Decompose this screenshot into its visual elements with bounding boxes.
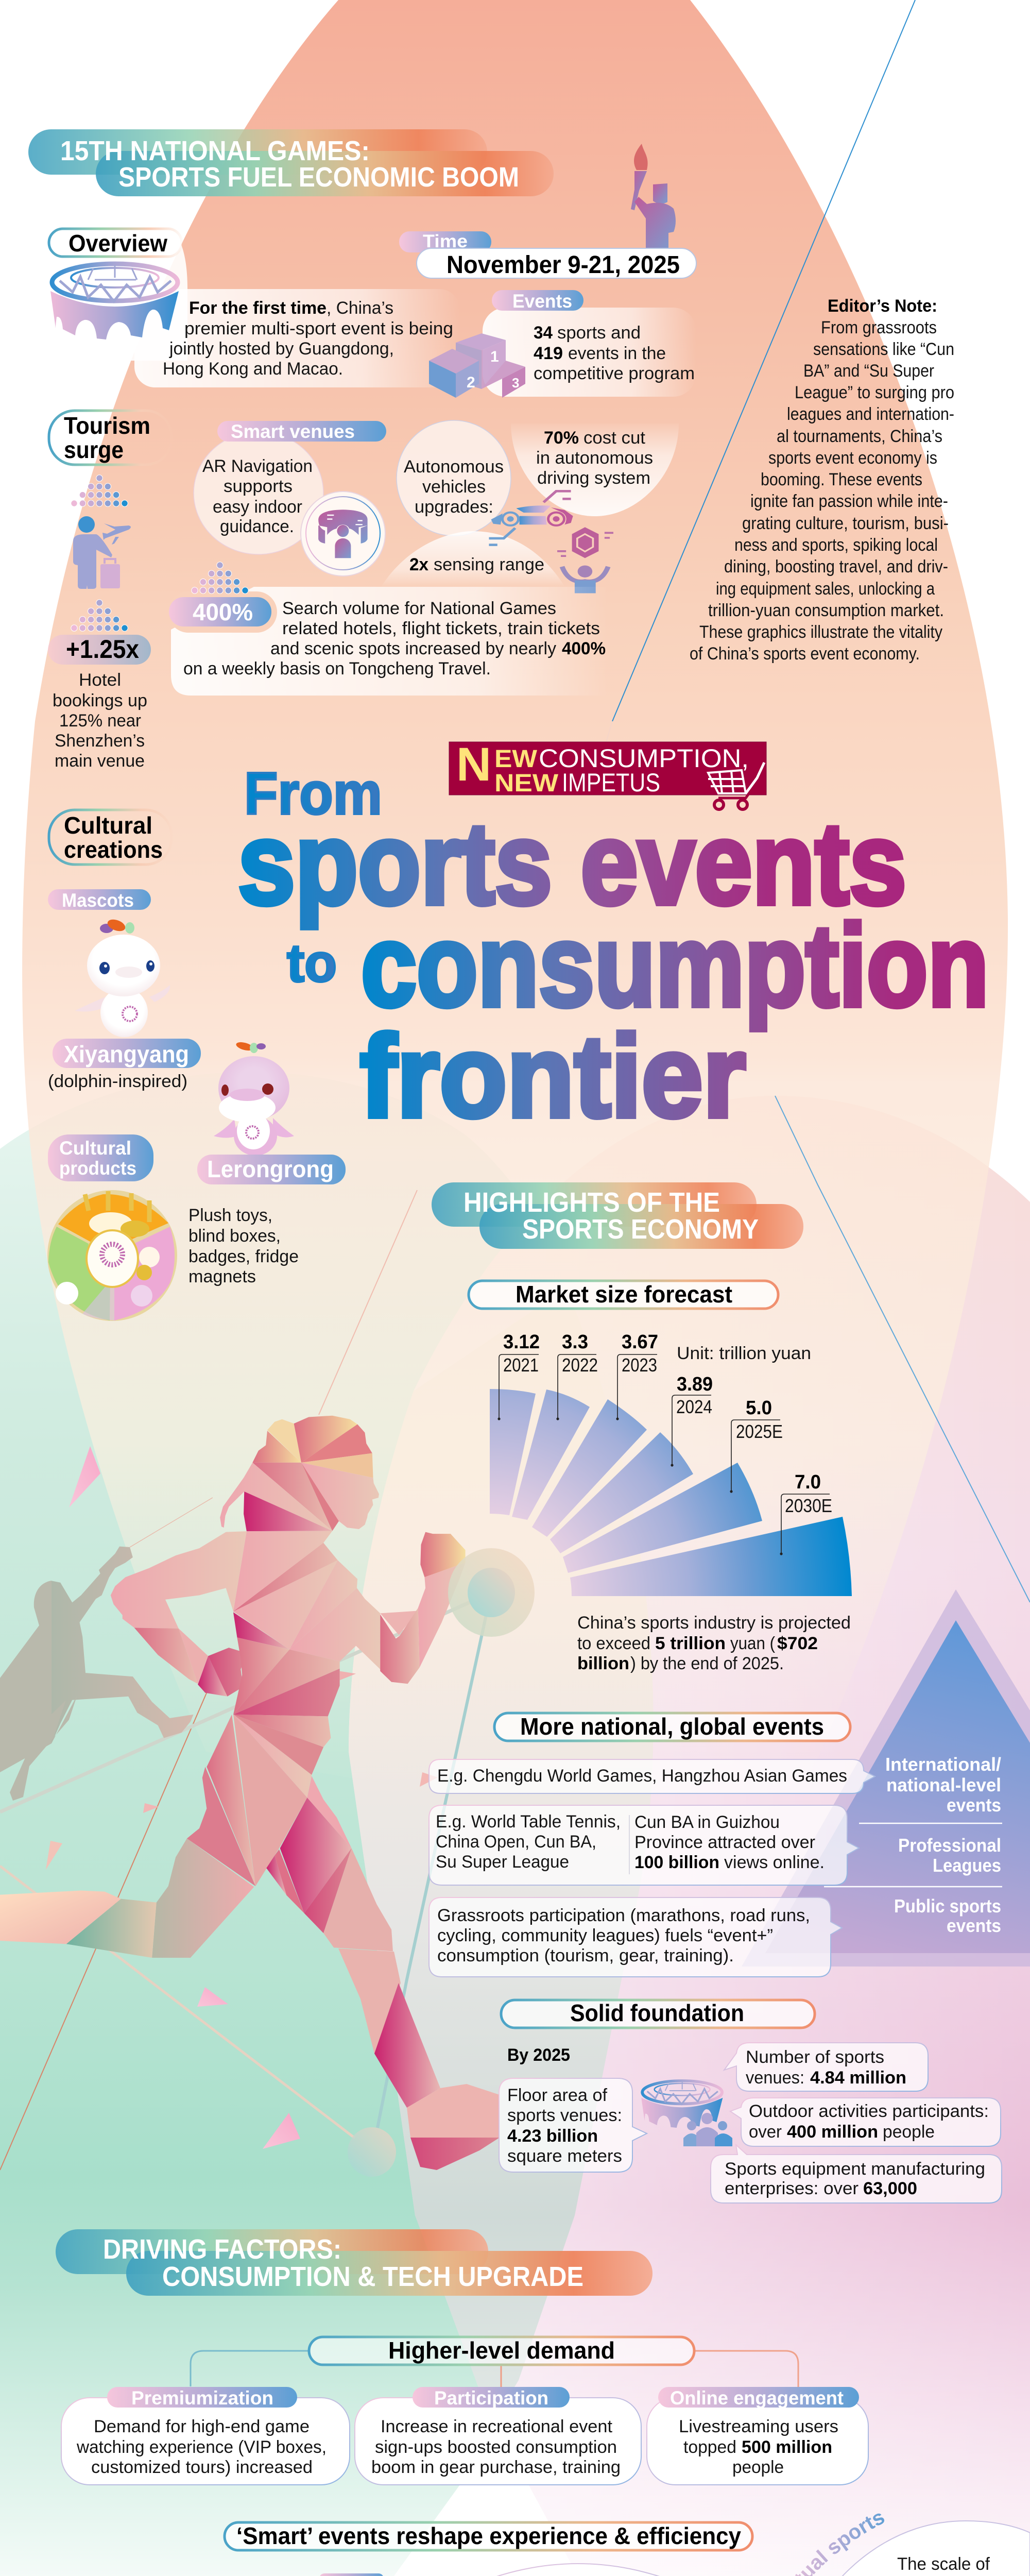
fan chart: market size: 3.67 bbox=[622, 1331, 658, 1353]
icon: podium: 2 bbox=[467, 374, 475, 391]
callout: professional leagues: E.g. World Table Tennis, bbox=[436, 1812, 621, 1832]
section banner: new consumption new impetus: IMPETUS bbox=[562, 768, 660, 797]
tourism surge heading: Tourism bbox=[64, 412, 150, 439]
cultural products text: blind boxes, bbox=[188, 1226, 281, 1246]
callout: professional leagues: 100 billion bbox=[634, 1853, 719, 1872]
2x sensing dome: sensing range bbox=[434, 555, 544, 574]
events panel: 34 bbox=[534, 323, 553, 343]
hotel bookings stat: main venue bbox=[55, 751, 145, 771]
card: online engagement: topped bbox=[683, 2437, 736, 2457]
callout: sports venues: venues: bbox=[746, 2068, 804, 2088]
callout: equipment enterprises: 63,000 bbox=[863, 2179, 917, 2198]
editor's note bbox=[690, 296, 954, 664]
time pill bbox=[399, 231, 491, 252]
search volume panel: related hotels, flight tickets, train tickets bbox=[282, 619, 600, 638]
section banner: new consumption new impetus: EW bbox=[494, 745, 538, 773]
callout: international events: E.g. Chengdu World Games, Hangzhou Asian Games bbox=[437, 1766, 847, 1786]
Xiyangyang label: Xiyangyang bbox=[64, 1041, 189, 1067]
pyramid chart: events bbox=[947, 1915, 1001, 1936]
tourism surge heading bbox=[49, 411, 171, 465]
icon: sensor person bbox=[557, 527, 613, 593]
editor's note: These graphics illustrate the vitality bbox=[699, 622, 942, 642]
callout: international events bbox=[429, 1759, 875, 1793]
70 percent bubble: driving system bbox=[537, 468, 650, 488]
callout: floor area bbox=[499, 2078, 647, 2172]
overview text box bbox=[134, 289, 460, 387]
search volume panel: and scenic spots increased by nearly bbox=[270, 639, 556, 658]
icon: torch bearer bbox=[631, 144, 676, 248]
card: online engagement bbox=[647, 2387, 868, 2485]
smart events heading: ‘Smart’ events reshape experience & efficiency bbox=[236, 2522, 741, 2549]
editor's note: BA” and “Su Super bbox=[803, 361, 934, 381]
overview heading: Overview bbox=[68, 230, 167, 257]
autonomous bubble bbox=[397, 420, 511, 536]
icon: dot pyramid hotel bbox=[71, 600, 128, 631]
card: online engagement: Livestreaming users bbox=[679, 2417, 838, 2436]
icon: shopping cart bbox=[708, 762, 764, 809]
background: mint and pink overlap wedge bbox=[349, 1288, 654, 2424]
Xiyangyang label: (dolphin-inspired) bbox=[48, 1072, 187, 1091]
smart venues: AR bubble: guidance. bbox=[220, 517, 294, 536]
card: premiumization: Demand for high-end game bbox=[94, 2417, 310, 2436]
fan chart: market size: 2021 bbox=[503, 1354, 539, 1376]
title banner: national games: SPORTS FUEL ECONOMIC BOOM bbox=[118, 162, 519, 193]
smart venues: AR bubble: AR Navigation bbox=[202, 456, 313, 476]
title banner: national games: 15TH NATIONAL GAMES: bbox=[60, 135, 370, 166]
callout: floor area: 4.23 billion bbox=[507, 2126, 598, 2146]
market size heading: Market size forecast bbox=[516, 1281, 732, 1308]
market forecast text: 5 trillion bbox=[655, 1634, 726, 1653]
dome: smart venue example bbox=[322, 2564, 793, 2576]
main headline: to bbox=[287, 934, 337, 993]
cultural products text bbox=[188, 1206, 299, 1286]
editor's note: al tournaments, China’s bbox=[777, 427, 942, 446]
section banner: driving factors bbox=[56, 2229, 653, 2296]
cultural products text: badges, fridge bbox=[188, 1247, 299, 1266]
fan chart: market size: 3.89 bbox=[677, 1374, 713, 1395]
cultural products text: Plush toys, bbox=[188, 1206, 272, 1225]
search volume panel bbox=[168, 587, 608, 696]
Xiyangyang label bbox=[48, 1039, 201, 1091]
callout: outdoor participants: over bbox=[749, 2122, 782, 2142]
solid foundation heading bbox=[501, 1999, 815, 2028]
icon: people bbox=[683, 2113, 732, 2146]
main headline bbox=[238, 760, 989, 1141]
date pill: November 9-21, 2025 bbox=[447, 251, 680, 279]
callout: professional leagues: views online. bbox=[724, 1853, 825, 1872]
hotel bookings stat: bookings up bbox=[53, 691, 147, 710]
section banner: highlights: SPORTS ECONOMY bbox=[522, 1214, 759, 1245]
icon: podium: 1 bbox=[490, 348, 499, 365]
by 2025 label: By 2025 bbox=[507, 2045, 570, 2065]
70 percent bubble: cost cut bbox=[583, 428, 646, 448]
higher-level demand heading bbox=[309, 2337, 694, 2365]
editor's note: From grassroots bbox=[821, 318, 937, 337]
more events heading: More national, global events bbox=[520, 1713, 824, 1740]
callout: public sports events: Grassroots participation (marathons, road runs, bbox=[437, 1906, 810, 1925]
main headline: From bbox=[244, 760, 382, 827]
cultural products image bbox=[47, 1190, 177, 1321]
dome: virtual sports: The scale of bbox=[897, 2554, 990, 2574]
smart venues pill: Smart venues bbox=[231, 421, 355, 442]
events panel: events in the bbox=[568, 344, 666, 363]
editor's note: trillion-yuan consumption market. bbox=[708, 601, 944, 620]
callout: public sports events: consumption (tourism, gear, training). bbox=[437, 1946, 734, 1965]
2x sensing dome: 2x bbox=[409, 555, 428, 574]
callout: professional leagues bbox=[429, 1805, 859, 1885]
callout: floor area: sports venues: bbox=[507, 2106, 622, 2125]
autonomous bubble: vehicles bbox=[422, 477, 486, 497]
fan chart: market size: 2024 bbox=[676, 1396, 712, 1417]
callout: floor area: Floor area of bbox=[507, 2086, 608, 2105]
smart venues: AR bubble: easy indoor bbox=[213, 497, 302, 517]
autonomous bubble: upgrades: bbox=[415, 497, 493, 517]
runner figure bbox=[0, 1416, 500, 2170]
events panel: sports and bbox=[557, 323, 641, 343]
editor's note: ing equipment sales, unlocking a bbox=[716, 579, 935, 599]
events panel: 419 bbox=[534, 344, 563, 363]
main headline: sports events bbox=[238, 798, 906, 928]
title banner: national games bbox=[28, 129, 554, 196]
cultural creations heading: creations bbox=[64, 836, 163, 863]
events panel bbox=[483, 290, 696, 397]
time pill: Time bbox=[423, 231, 468, 251]
smart venues: AR bubble bbox=[194, 432, 323, 554]
card: premiumization: customized tours) increased bbox=[91, 2458, 313, 2477]
pyramid chart: Professional bbox=[898, 1835, 1001, 1856]
callout: professional leagues: China Open, Cun BA, bbox=[436, 1832, 596, 1852]
dome: virtual sports bbox=[781, 2521, 1030, 2576]
overview text box: , China’s bbox=[327, 298, 393, 318]
cultural creations heading: Cultural bbox=[64, 812, 152, 839]
market forecast text: $702 bbox=[777, 1634, 818, 1653]
hotel bookings stat bbox=[48, 635, 151, 771]
card: online engagement: people bbox=[732, 2458, 784, 2477]
editor's note: ignite fan passion while inte- bbox=[750, 492, 948, 511]
search volume panel: on a weekly basis on Tongcheng Travel. bbox=[183, 659, 491, 679]
card: premiumization: watching experience (VIP boxes, bbox=[76, 2437, 327, 2457]
icon: traveler with plane bbox=[73, 516, 131, 589]
callout: professional leagues: Province attracted over bbox=[634, 1833, 815, 1852]
card: online engagement: Online engagement bbox=[670, 2387, 844, 2409]
editor's note: sensations like “Cun bbox=[813, 340, 954, 359]
cultural products text: magnets bbox=[188, 1267, 256, 1286]
fan chart: market size: 2025E bbox=[736, 1421, 783, 1442]
pyramid chart: International/ bbox=[885, 1754, 1001, 1775]
callout: outdoor participants bbox=[730, 2098, 1001, 2146]
callout: public sports events bbox=[429, 1897, 842, 1977]
card: participation bbox=[355, 2387, 641, 2485]
smart venues: AR bubble: supports bbox=[224, 477, 293, 496]
tree connector lines bbox=[191, 2351, 798, 2388]
cultural products pill: Cultural bbox=[59, 1138, 131, 1159]
overview text box: Hong Kong and Macao. bbox=[163, 359, 343, 379]
hotel bookings stat: Shenzhen’s bbox=[55, 731, 145, 751]
Lerongrong label: Lerongrong bbox=[207, 1156, 334, 1182]
mascot: Xiyangyang bbox=[75, 917, 170, 1037]
2x sensing dome bbox=[381, 531, 565, 587]
card: participation: sign-ups boosted consumption bbox=[375, 2437, 617, 2457]
section banner: driving factors: CONSUMPTION & TECH UPGRADE bbox=[162, 2261, 583, 2292]
pyramid chart bbox=[742, 1589, 1030, 1967]
card: participation: boom in gear purchase, training bbox=[371, 2458, 621, 2477]
card: participation: Increase in recreational event bbox=[381, 2417, 613, 2436]
callout: equipment enterprises: enterprises: over bbox=[725, 2179, 859, 2198]
pyramid chart: national-level bbox=[886, 1774, 1001, 1795]
icon: car bbox=[489, 491, 573, 545]
fan chart: market size: 7.0 bbox=[795, 1471, 821, 1493]
market forecast text: China’s sports industry is projected bbox=[577, 1613, 851, 1633]
section banner: driving factors: DRIVING FACTORS: bbox=[103, 2234, 341, 2265]
callout: equipment enterprises: Sports equipment manufacturing bbox=[725, 2159, 985, 2179]
editor's note: League” to surging pro bbox=[795, 383, 954, 402]
editor's note: booming. These events bbox=[761, 470, 922, 489]
card: premiumization: Premiumization bbox=[131, 2387, 273, 2409]
section banner: highlights: HIGHLIGHTS OF THE bbox=[464, 1187, 720, 1218]
autonomous bubble: Autonomous bbox=[404, 457, 504, 477]
icon: podium: 3 bbox=[512, 375, 519, 391]
mascot: Lerongrong bbox=[214, 1041, 294, 1156]
background: salmon leaf bbox=[22, 0, 1008, 1855]
callout: floor area: square meters bbox=[507, 2146, 622, 2166]
main headline: frontier bbox=[360, 1011, 746, 1141]
icon: dot pyramid top bbox=[71, 475, 128, 506]
cultural products pill: products bbox=[59, 1158, 136, 1179]
hotel bookings stat: 125% near bbox=[59, 711, 141, 731]
callout: outdoor participants: 400 million bbox=[787, 2122, 878, 2142]
cultural products pill bbox=[48, 1134, 153, 1181]
market forecast text bbox=[577, 1613, 851, 1673]
market forecast text: yuan ( bbox=[730, 1634, 776, 1653]
card: premiumization bbox=[61, 2387, 350, 2485]
market forecast text: billion bbox=[577, 1654, 629, 1673]
higher-level demand heading: Higher-level demand bbox=[388, 2337, 615, 2364]
market forecast text: ) by the end of 2025. bbox=[630, 1654, 784, 1673]
icon: stadium bbox=[50, 264, 179, 340]
editor's note: dining, boosting travel, and driv- bbox=[724, 557, 948, 577]
section banner: new consumption new impetus: NEW bbox=[494, 770, 559, 797]
ovals and shards around runner bbox=[46, 1446, 535, 2177]
editor's note: Editor’s Note: bbox=[828, 296, 937, 316]
overview text box: jointly hosted by Guangdong, bbox=[169, 339, 394, 359]
tourism surge heading: surge bbox=[64, 436, 124, 463]
icon: small stadium bbox=[641, 2081, 723, 2128]
events panel: Events bbox=[512, 291, 572, 312]
callout: equipment enterprises bbox=[711, 2145, 1002, 2203]
fan chart: market size bbox=[490, 1331, 852, 1596]
fan chart: market size: 2022 bbox=[562, 1354, 598, 1376]
market forecast text: to exceed bbox=[577, 1634, 650, 1653]
callout: professional leagues: Cun BA in Guizhou bbox=[634, 1812, 780, 1832]
fan chart: market size: 2023 bbox=[622, 1354, 657, 1376]
overview text box: premier multi-sport event is being bbox=[184, 319, 453, 338]
icon: AR venue circle bbox=[301, 492, 385, 576]
callout: sports venues: Number of sports bbox=[746, 2047, 884, 2067]
pyramid chart: events bbox=[947, 1794, 1001, 1816]
fan chart: market size: 3.3 bbox=[562, 1331, 588, 1353]
editor's note: grating culture, tourism, busi- bbox=[742, 514, 949, 533]
background: mint leaf bbox=[0, 1072, 656, 2576]
editor's note: ness and sports, spiking local bbox=[734, 535, 938, 555]
pyramid chart: Public sports bbox=[894, 1895, 1001, 1917]
section banner: new consumption new impetus bbox=[449, 738, 766, 797]
editor's note: sports event economy is bbox=[768, 448, 937, 468]
70 percent bubble: in autonomous bbox=[536, 448, 653, 468]
fencer silhouette bbox=[0, 1498, 213, 1801]
background: pink leaf bbox=[349, 1096, 1030, 2576]
section banner: new consumption new impetus: CONSUMPTION, bbox=[539, 744, 749, 773]
callout: sports venues: 4.84 million bbox=[810, 2068, 906, 2088]
callout: sports venues bbox=[724, 2043, 928, 2091]
card: online engagement: 500 million bbox=[742, 2437, 832, 2457]
section banner: new consumption new impetus: N bbox=[456, 738, 491, 791]
mascots pill: Mascots bbox=[62, 890, 134, 911]
callout: outdoor participants: Outdoor activities participants: bbox=[749, 2102, 989, 2121]
icon: dot pyramid search bbox=[192, 562, 248, 594]
70 percent bubble: 70% bbox=[544, 428, 579, 448]
hotel bookings stat: Hotel bbox=[79, 670, 121, 690]
70 percent bubble bbox=[511, 423, 679, 516]
card: participation: Participation bbox=[434, 2387, 548, 2409]
callout: public sports events: cycling, community leagues) fuels “event+” bbox=[437, 1926, 773, 1945]
section banner: highlights bbox=[432, 1182, 803, 1249]
search volume panel: 400% bbox=[193, 599, 253, 625]
events panel: competitive program bbox=[534, 364, 695, 383]
overview text box: For the first time bbox=[189, 298, 327, 318]
search volume panel: Search volume for National Games bbox=[282, 599, 556, 618]
search volume panel: 400% bbox=[562, 639, 606, 658]
callout: outdoor participants: people bbox=[883, 2122, 935, 2142]
editor's note: leagues and internation- bbox=[787, 404, 954, 424]
icon: VR headset bbox=[302, 2573, 402, 2576]
icon: podium bbox=[429, 333, 525, 398]
fan chart: market size: 5.0 bbox=[746, 1397, 772, 1419]
pyramid chart: Leagues bbox=[933, 1855, 1001, 1876]
white backing behind overview bbox=[48, 228, 187, 361]
solid foundation heading: Solid foundation bbox=[570, 1999, 744, 2026]
cultural creations heading bbox=[49, 810, 171, 865]
hotel bookings stat: +1.25x bbox=[66, 635, 139, 664]
callout: professional leagues: Su Super League bbox=[436, 1852, 569, 1872]
fan chart: market size: 3.12 bbox=[503, 1331, 540, 1353]
fan chart: market size: Unit: trillion yuan bbox=[677, 1344, 811, 1363]
fan chart: market size: 2030E bbox=[785, 1495, 832, 1516]
editor's note: of China’s sports event economy. bbox=[690, 644, 920, 664]
